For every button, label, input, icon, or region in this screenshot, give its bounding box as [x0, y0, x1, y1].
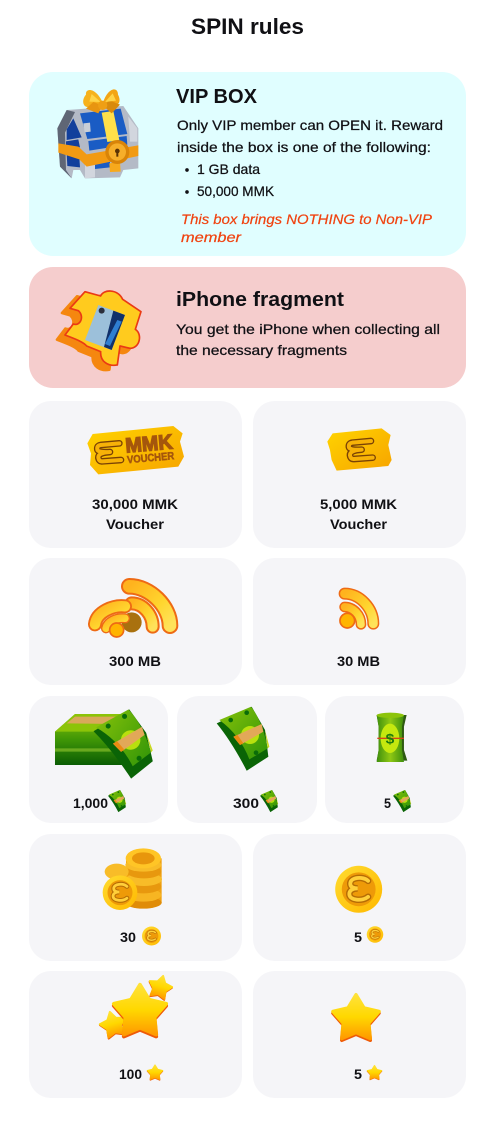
card: 5 cash — [325, 696, 464, 823]
card: 5 stars — [253, 971, 466, 1098]
icon: coin stack — [103, 848, 162, 910]
icon: small star — [367, 1065, 382, 1080]
label: 5 — [354, 930, 363, 945]
icon: large voucher — [87, 426, 184, 474]
icon: small coin — [142, 926, 161, 946]
heading: iPhone fragment: iPhone fragment — [176, 289, 344, 311]
icon: cash brick and bundle — [55, 707, 155, 782]
icon: three stars — [97, 973, 174, 1040]
text: iPhone description — [176, 321, 440, 358]
label: Voucher — [330, 517, 388, 532]
card: 30 MB — [253, 558, 466, 685]
card: 30,000 MMK voucher — [29, 401, 242, 548]
text: VIP description: 50,000 MMK — [197, 183, 275, 199]
text: iPhone description: the necessary fragments — [176, 342, 347, 358]
text: VIP warning — [181, 211, 433, 245]
text: VIP description: inside the box is one of the following: — [177, 139, 431, 155]
icon: small coin — [367, 926, 383, 943]
label: Voucher — [106, 517, 165, 532]
card: 5 coins — [253, 834, 466, 961]
label: 30 MB — [337, 654, 380, 669]
icon: large voucher: MMK — [124, 431, 174, 458]
icon: cash roll: $ — [386, 730, 395, 746]
title: SPIN rules — [191, 14, 304, 39]
label — [92, 497, 178, 532]
label: 300 — [233, 796, 259, 811]
icon: star — [333, 995, 379, 1040]
text: VIP warning: This box brings NOTHING to Non-VIP — [181, 211, 433, 227]
icon: small voucher — [327, 428, 392, 471]
heading: VIP BOX: VIP BOX — [176, 86, 258, 108]
card: 5,000 MMK voucher — [253, 401, 466, 548]
icon: double wifi — [95, 586, 170, 637]
card: 100 stars — [29, 971, 242, 1098]
text: iPhone description: You get the iPhone when collecting all — [176, 321, 440, 337]
label: 5,000 MMK — [320, 497, 397, 512]
card: 300 MB — [29, 558, 242, 685]
panel: iPhone fragment — [29, 267, 466, 388]
label: 1,000 — [73, 796, 108, 811]
label: 100 — [119, 1067, 142, 1082]
label — [320, 497, 397, 532]
label: 5 — [354, 1067, 363, 1082]
text: VIP description — [177, 117, 443, 199]
card: 30 coins — [29, 834, 242, 961]
icon: small star — [147, 1065, 163, 1080]
icon: large voucher: VOUCHER — [127, 450, 175, 466]
icon: small cash — [393, 790, 411, 812]
label: 5 — [384, 796, 391, 811]
card: 300 cash — [177, 696, 317, 823]
icon: cash bundle — [217, 707, 269, 771]
text: VIP description: Only VIP member can OPEN it. Reward — [177, 117, 443, 133]
icon: small cash — [260, 790, 278, 812]
panel: VIP box — [29, 72, 466, 256]
icon: coin — [335, 866, 382, 913]
text: VIP description: 1 GB data — [197, 161, 260, 177]
text: VIP warning: member — [181, 229, 243, 245]
icon: treasure chest — [57, 89, 138, 178]
icon: puzzle piece with phone — [57, 291, 141, 370]
label: 300 MB — [109, 654, 161, 669]
card: 1,000 cash — [29, 696, 168, 823]
icon: small cash — [108, 790, 126, 812]
icon: wifi — [340, 594, 373, 628]
label: 30,000 MMK — [92, 497, 178, 512]
label: 30 — [120, 930, 136, 945]
